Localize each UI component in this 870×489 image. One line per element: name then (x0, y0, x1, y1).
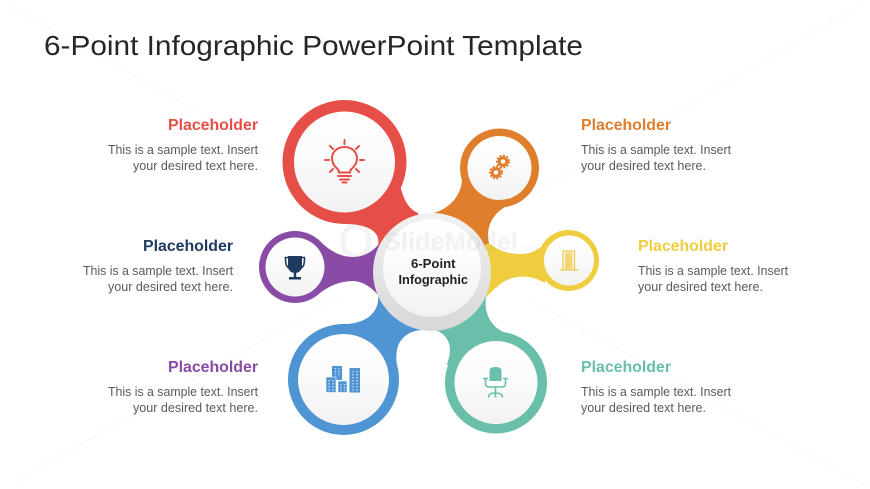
diagram: six-point hub (259, 100, 599, 435)
text block: yellow (638, 238, 789, 294)
watermark: .com (518, 242, 538, 252)
text block: yellow: This is a sample text. Insert (638, 264, 789, 278)
text block: orange: This is a sample text. Insert (581, 143, 732, 157)
icon: door (560, 251, 578, 270)
center label: Infographic (398, 273, 468, 287)
text block: orange (581, 117, 732, 173)
icon: buildings (326, 366, 360, 392)
node: blue (288, 324, 399, 435)
title: 6-Point Infographic PowerPoint Template (44, 30, 583, 61)
text block: navy (83, 238, 234, 294)
text block: purple: This is a sample text. Insert (108, 385, 259, 399)
text block: orange: Placeholder (581, 117, 671, 134)
node: red (282, 100, 406, 224)
watermark: SlideModel (384, 228, 518, 256)
text block: green: Placeholder (581, 359, 671, 376)
node: yellow (538, 230, 599, 291)
text block: yellow: your desired text here. (638, 280, 763, 294)
text block: orange: your desired text here. (581, 159, 706, 173)
text block: green: This is a sample text. Insert (581, 385, 732, 399)
text block: red: This is a sample text. Insert (108, 143, 259, 157)
text block: navy: This is a sample text. Insert (83, 264, 234, 278)
text block: red (108, 117, 259, 173)
text block: green (581, 359, 732, 415)
text block: purple (108, 359, 259, 415)
connector: red (345, 185, 432, 272)
icon: office chair (483, 367, 508, 398)
connector: purple (316, 239, 432, 296)
text block: red: your desired text here. (133, 159, 258, 173)
connector: blue (345, 272, 432, 373)
icon: light bulb (325, 140, 364, 182)
icon: gears (490, 156, 509, 178)
connector: orange (432, 180, 505, 272)
connector: yellow (432, 240, 548, 298)
text block: red: Placeholder (168, 117, 258, 134)
text block: green: your desired text here. (581, 401, 706, 415)
node: orange (460, 128, 539, 208)
node: green (445, 332, 547, 434)
connector: green (432, 272, 508, 372)
center label (398, 257, 468, 287)
center label: 6-Point (411, 257, 456, 271)
text block: yellow: Placeholder (638, 238, 728, 255)
watermark (343, 226, 538, 256)
text block: purple: Placeholder (168, 359, 258, 376)
node: purple (259, 231, 331, 303)
text block: purple: your desired text here. (133, 401, 258, 415)
center circle (343, 213, 538, 331)
icon: trophy (286, 256, 304, 280)
text block: navy: Placeholder (143, 238, 233, 255)
text block: navy: your desired text here. (108, 280, 233, 294)
